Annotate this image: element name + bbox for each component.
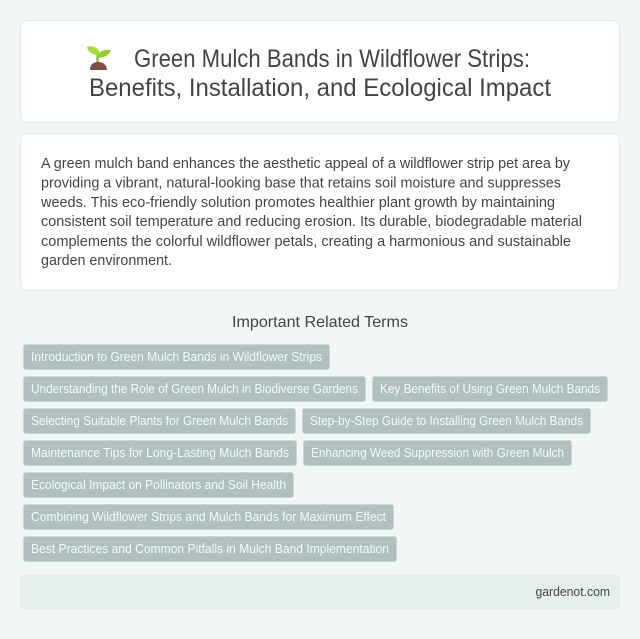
- text block: description: complements the colorful wildflower petals, creating a harmonious and sustainable: [41, 233, 571, 250]
- tag: [24, 536, 396, 562]
- panel: title card: [20, 20, 620, 122]
- tag: Ecological Impact on Pollinators and Soil Health: [31, 477, 286, 492]
- panel: related term tags: [24, 344, 608, 562]
- icon: seedling: [87, 46, 111, 70]
- text block: description: consistent soil temperature and reducing erosion. Its durable, biodegradable material: [41, 213, 582, 230]
- tag: Enhancing Weed Suppression with Green Mulch: [311, 445, 564, 460]
- heading: important related terms: Important Related Terms: [232, 314, 408, 331]
- text block: description: providing a vibrant, natural-looking base that retains soil moisture and suppresses: [41, 174, 561, 192]
- tag: [24, 472, 294, 498]
- tag: Introduction to Green Mulch Bands in Wildflower Strips: [31, 349, 322, 364]
- tag: Combining Wildflower Strips and Mulch Bands for Maximum Effect: [31, 509, 386, 524]
- tag: [372, 376, 608, 402]
- text block: description: A green mulch band enhances the aesthetic appeal of a wildflower strip pet area by: [41, 155, 570, 172]
- tag: Understanding the Role of Green Mulch in Biodiverse Gardens: [31, 381, 358, 396]
- tag: Key Benefits of Using Green Mulch Bands: [380, 381, 600, 396]
- tag: [24, 408, 296, 434]
- footer: [20, 575, 620, 609]
- tag: Step-by-Step Guide to Installing Green Mulch Bands: [310, 413, 583, 428]
- title: Green Mulch Bands in Wildflower Strips:: [134, 45, 530, 73]
- tag: [304, 440, 572, 466]
- panel: description card: [20, 134, 620, 290]
- text block: description: [40, 155, 582, 269]
- tag: Selecting Suitable Plants for Green Mulch Bands: [31, 413, 288, 428]
- tag: [24, 440, 296, 466]
- text block: description: weeds. This eco-friendly solution promotes healthier plant growth by maintaining: [40, 194, 555, 211]
- tag: Best Practices and Common Pitfalls in Mulch Band Implementation: [31, 541, 389, 556]
- title: [89, 45, 551, 102]
- tag: Maintenance Tips for Long-Lasting Mulch Bands: [31, 445, 289, 460]
- text block: description: garden environment.: [41, 252, 172, 269]
- tag: [302, 408, 590, 434]
- tag: [24, 344, 330, 370]
- title: Benefits, Installation, and Ecological Impact: [89, 74, 551, 102]
- tag: [24, 376, 366, 402]
- footer: gardenot.com: [536, 585, 610, 599]
- tag: [24, 504, 394, 530]
